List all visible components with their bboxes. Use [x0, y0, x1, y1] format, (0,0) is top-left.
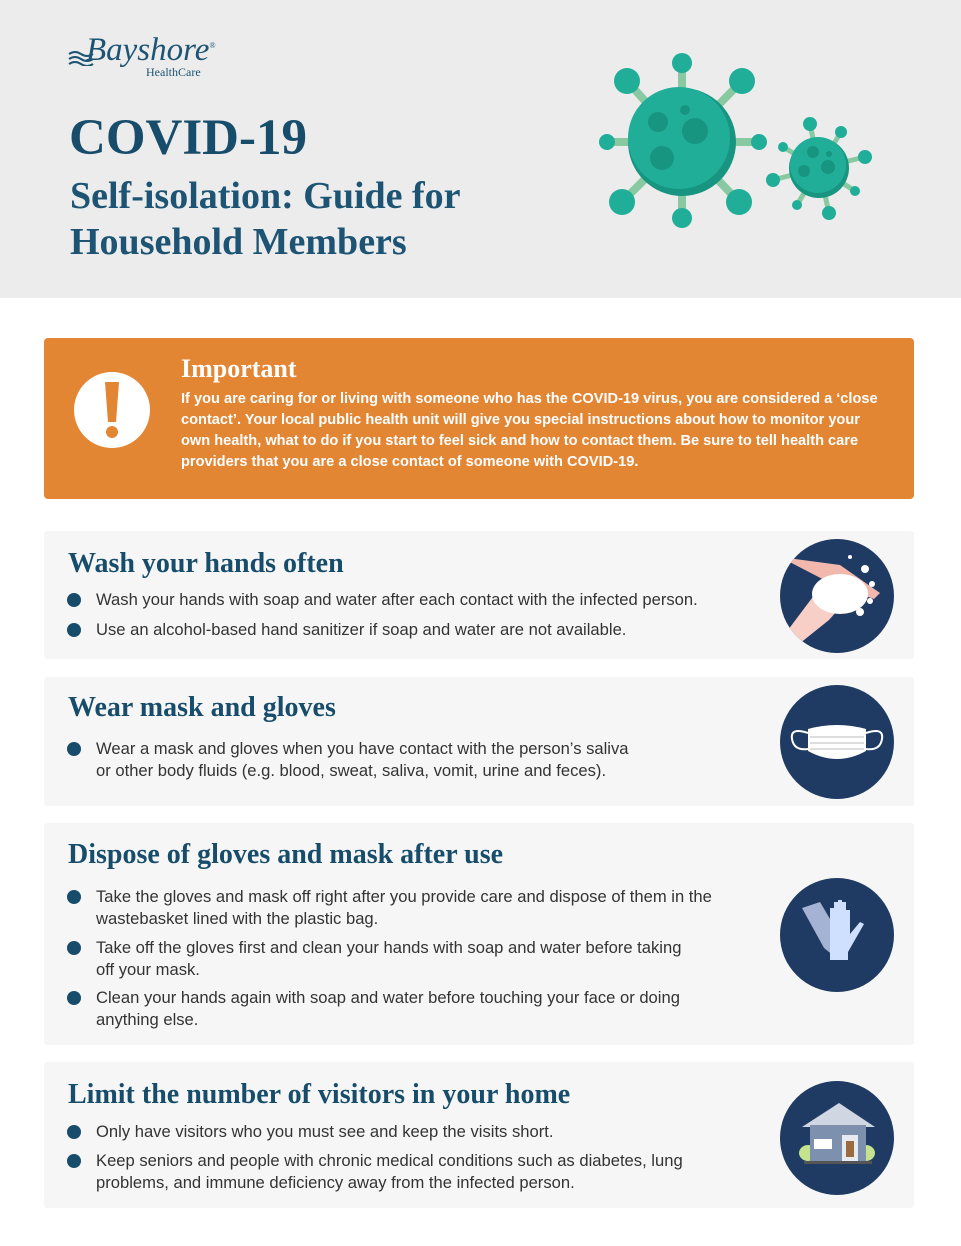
panel: visitors: Keep seniors and people with chronic medical conditions such as diabetes, lung: [96, 1151, 683, 1170]
icon: mask: [780, 685, 894, 799]
callout: important: own health, what to do if you start to feel sick and how to contact them. Be sure to tell health care: [181, 433, 858, 449]
title: COVID-19: [69, 110, 307, 166]
panel: visitors: [44, 1062, 914, 1208]
panel: visitors: Limit the number of visitors in your home: [68, 1079, 570, 1110]
logo: Bayshore®: [86, 32, 216, 68]
icon: gloves: [780, 878, 894, 992]
icon: washing hands: [780, 539, 894, 653]
panel: visitors: Only have visitors who you must see and keep the visits short.: [96, 1122, 553, 1141]
panel: dispose: Take off the gloves first and clean your hands with soap and water before taking: [96, 938, 681, 957]
panel: dispose: [44, 823, 914, 1045]
subtitle: Household Members: [70, 221, 407, 263]
panel: dispose: Dispose of gloves and mask after use: [68, 839, 503, 870]
panel: dispose: anything else.: [96, 1010, 198, 1029]
panel: wash hands: [44, 531, 914, 659]
subtitle: [70, 175, 461, 263]
panel: dispose: off your mask.: [96, 960, 200, 979]
panel: mask and gloves: or other body fluids (e.g. blood, sweat, saliva, vomit, urine and feces).: [96, 761, 606, 780]
panel: wash hands: Wash your hands with soap and water after each contact with the infected person.: [96, 590, 698, 609]
panel: mask and gloves: Wear a mask and gloves when you have contact with the person’s saliva: [96, 739, 629, 758]
panel: dispose: wastebasket lined with the plastic bag.: [96, 909, 378, 928]
panel: wash hands: Use an alcohol-based hand sanitizer if soap and water are not available.: [96, 620, 626, 639]
callout: important: contact’. Your local public health unit will give you special instructions about how to monitor your: [181, 412, 860, 428]
icon: house: [780, 1081, 894, 1195]
panel: mask and gloves: [44, 677, 914, 806]
subtitle: Self-isolation: Guide for: [70, 175, 461, 217]
panel: mask and gloves: Wear mask and gloves: [68, 692, 336, 723]
panel: dispose: Clean your hands again with soap and water before touching your face or doing: [96, 988, 680, 1007]
panel: wash hands: Wash your hands often: [68, 548, 344, 579]
callout: important: providers that you are a close contact of someone with COVID-19.: [181, 454, 638, 470]
panel: visitors: problems, and immune deficiency away from the infected person.: [96, 1173, 575, 1192]
callout: important: If you are caring for or living with someone who has the COVID-19 virus, you are considered a ‘close: [181, 391, 878, 407]
logo: [68, 32, 216, 79]
header band: [0, 0, 961, 298]
callout: important: [44, 338, 914, 499]
icon: virus: [599, 53, 872, 228]
logo: HealthCare: [146, 65, 201, 79]
panel: dispose: Take the gloves and mask off right after you provide care and dispose of them in the: [96, 887, 712, 906]
icon: exclamation: [74, 372, 150, 448]
callout: important: Important: [181, 354, 297, 383]
